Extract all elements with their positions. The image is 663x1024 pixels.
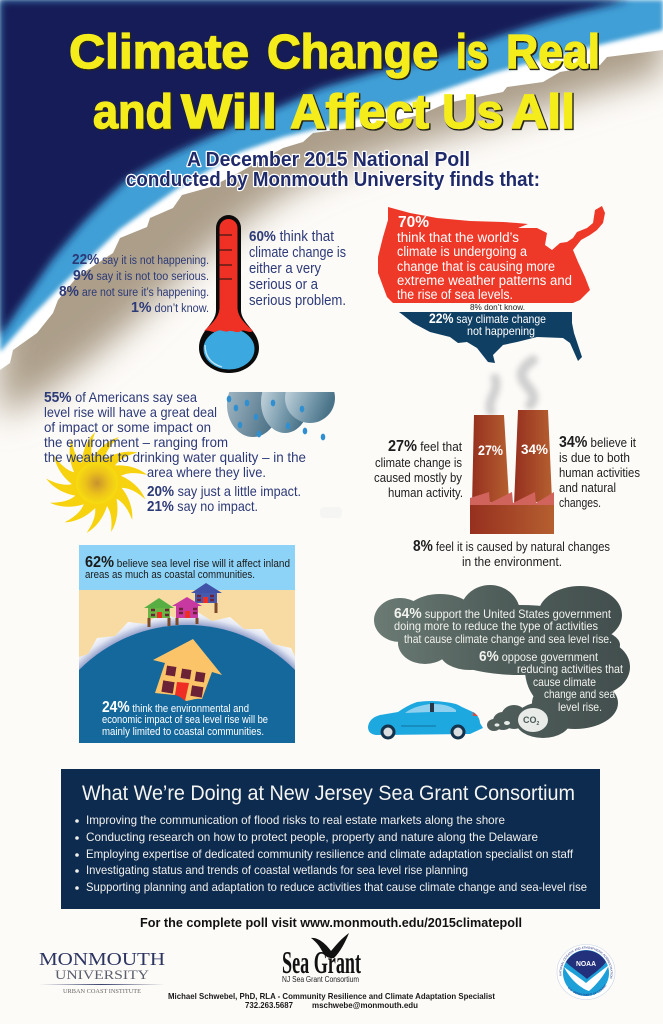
text: 64 percent [394,605,612,646]
logo: Monmouth University: MONMOUTH [39,949,165,969]
text: 34 percent both: is due to both [559,450,630,465]
panel: what we're doing [61,769,600,909]
text: 24 percent: mainly limited to coastal communities. [102,726,264,738]
title [69,26,600,139]
text: 60 percent: either a very [249,261,322,277]
text: thermometer left stats: 8% are not sure it’s happening. [59,283,209,300]
icon: magenta stilt house [172,597,202,625]
subtitle: A December 2015 National Poll [187,149,470,171]
title: Will [181,86,277,139]
logo: Sea Grant: NJ Sea Grant Consortium [282,975,359,984]
title: is [456,26,488,79]
text: 55 percent continued [44,434,306,515]
text: 55 percent sea level rise: level rise will have a great deal [44,404,217,420]
text: 62 percent [85,554,290,581]
text: 55 percent sea level rise: of impact or some impact on [44,419,211,435]
background: earth curve from space [0,0,663,418]
icon: CO2 puff: 2 [536,721,540,727]
text: 34 percent both: 34% believe it [559,434,636,451]
icon: rain cloud [226,392,335,440]
text: contact: 732.263.5687 [245,1000,293,1010]
heading: what we're doing: What We’re Doing at New Jersey Sea Grant Consortium [82,782,575,805]
text: poll link: For the complete poll visit www.monmouth.edu/2015climatepoll [140,915,522,930]
text: 62 percent: 62% believe sea level rise will it affect inland [85,554,290,571]
text: contact: mschwebe@monmouth.edu [312,1000,418,1010]
text: thermometer left stats [59,251,209,316]
list: actions: Conducting research on how to protect people, property and nature along the Delaware [86,830,538,844]
logo: Monmouth University: UNIVERSITY [55,967,150,982]
text: 60 percent [249,229,346,309]
title: Us [442,86,503,139]
text: 6 percent [479,648,624,714]
icon: factory [470,410,554,534]
logo: Monmouth University [39,949,165,995]
icon: CO2 puff: CO [523,715,536,725]
title: Change [267,26,438,79]
icon: blue stilt house [191,583,222,613]
text: 55 percent continued: the environment – ranging from [44,434,228,450]
map: United States 70 percent and 22 percent: 70% [398,214,429,231]
list: actions [75,813,587,894]
text: 24 percent: economic impact of sea level rise will be [102,714,268,726]
icon: factory: 27% [478,442,503,458]
text: 60 percent: climate change is [249,245,346,261]
text: 60 percent: serious or a [249,277,319,293]
text: 62 percent: areas as much as coastal communities. [85,569,255,581]
title: Climate [69,26,249,79]
text: 27 percent human activity: human activity. [388,485,463,500]
text: 24 percent [102,699,268,738]
text: contact [168,991,495,1010]
icon: factory smoke [490,360,533,412]
text: 27 percent human activity [374,438,463,500]
text: 64 percent: that cause climate change and sea level rise. [404,632,612,646]
text: 27 percent human activity: 27% feel that [388,438,462,455]
icon: factory: 34% [521,441,549,457]
text: 60 percent: 60% think that [249,229,334,245]
text: 8 percent natural changes [413,538,610,569]
text: thermometer left stats: 1% don’t know. [131,299,209,316]
icon: green stilt house [144,598,174,627]
subtitle [126,149,540,191]
text: 60 percent: serious problem. [249,293,346,309]
title: Affect [290,86,429,139]
text: contact: Michael Schwebel, PhD, RLA - Community Resilience and Climate Adaptation Specialist [168,991,495,1001]
logo: NOAA: NATIONAL OCEANIC AND ATMOSPHERIC ADMINISTRATION [559,946,613,978]
text: 55 percent continued: the weather to drinking water quality – in the [44,449,306,465]
map: United States 70 percent and 22 percent: 8% don’t know. [470,303,525,312]
text: 6 percent: change and sea [544,687,615,701]
icon: faint ghost car [320,507,342,518]
logo: Monmouth University: URBAN COAST INSTITUTE [63,988,141,995]
title: and [93,86,173,139]
map: United States 70 percent and 22 percent: think that the world’s [397,230,519,245]
map: United States 70 percent and 22 percent: 22% say climate change [429,310,546,326]
text: 27 percent human activity: caused mostly by [374,470,462,485]
text: 6 percent: cause climate [533,675,596,689]
logo: NOAA: U.S. DEPARTMENT OF COMMERCE [568,984,606,996]
map: United States 70 percent and 22 percent: extreme weather patterns and [397,273,572,288]
title: All [511,86,575,139]
icon: sun [46,432,147,533]
text: 8 percent natural changes: in the environment. [462,554,562,569]
text: 6 percent: 6% oppose government [479,648,599,665]
list: actions: Investigating status and trends of coastal wetlands for sea level rise planning [86,863,468,877]
panel: coastal communities [79,545,295,743]
map: United States 70 percent and 22 percent: not happening [467,324,535,338]
icon: car [368,701,483,740]
text: 55 percent sea level rise [44,389,217,435]
text: 55 percent continued: area where they live. [147,464,266,480]
text: 55 percent sea level rise: 55% of Americans say sea [44,389,197,406]
text: 8 percent natural changes: 8% feel it is caused by natural changes [413,538,610,555]
logo: Sea Grant [282,933,361,984]
text: 55 percent continued: 21% say no impact. [147,498,258,515]
text: 34 percent both [559,434,640,510]
icon: CO2 puff [494,708,548,732]
map: United States 70 percent and 22 percent [378,206,605,363]
map: United States 70 percent and 22 percent: climate is undergoing a [397,244,527,259]
text: 55 percent continued: 20% say just a little impact. [147,483,301,500]
map: United States 70 percent and 22 percent: the rise of sea levels. [397,287,513,302]
text: 34 percent both: changes. [559,495,601,510]
list: actions: Improving the communication of flood risks to real estate markets along the shore [86,813,505,827]
text: 24 percent: 24% think the environmental and [102,699,249,716]
list: actions: Employing expertise of dedicated community resilience and climate adaptation specialist on staff [86,847,574,861]
subtitle: conducted by Monmouth University finds that: [126,169,540,191]
text: thermometer left stats: 9% say it is not too serious. [73,267,209,284]
text: thermometer left stats: 22% say it is not happening. [72,251,209,268]
icon: thermometer [199,215,259,373]
logo: NOAA: NOAA [576,961,596,968]
map: United States 70 percent and 22 percent: change that is causing more [397,259,555,274]
text: 27 percent human activity: climate change is [375,455,462,470]
list: actions: Supporting planning and adaptation to reduce activities that cause climate change and sea-level rise [86,880,587,894]
title: Real [506,26,600,79]
text: 6 percent: level rise. [558,700,602,714]
text: 34 percent both: human activities [559,465,640,480]
text: 64 percent: doing more to reduce the type of activities [394,619,598,633]
text: 34 percent both: and natural [559,480,616,495]
icon: sinking house [153,639,222,701]
icon: exhaust cloud [374,585,630,738]
text: 64 percent: 64% support the United States government [394,605,612,622]
text: 6 percent: reducing activities that [517,662,624,676]
logo: Sea Grant: Sea Grant [282,944,361,980]
